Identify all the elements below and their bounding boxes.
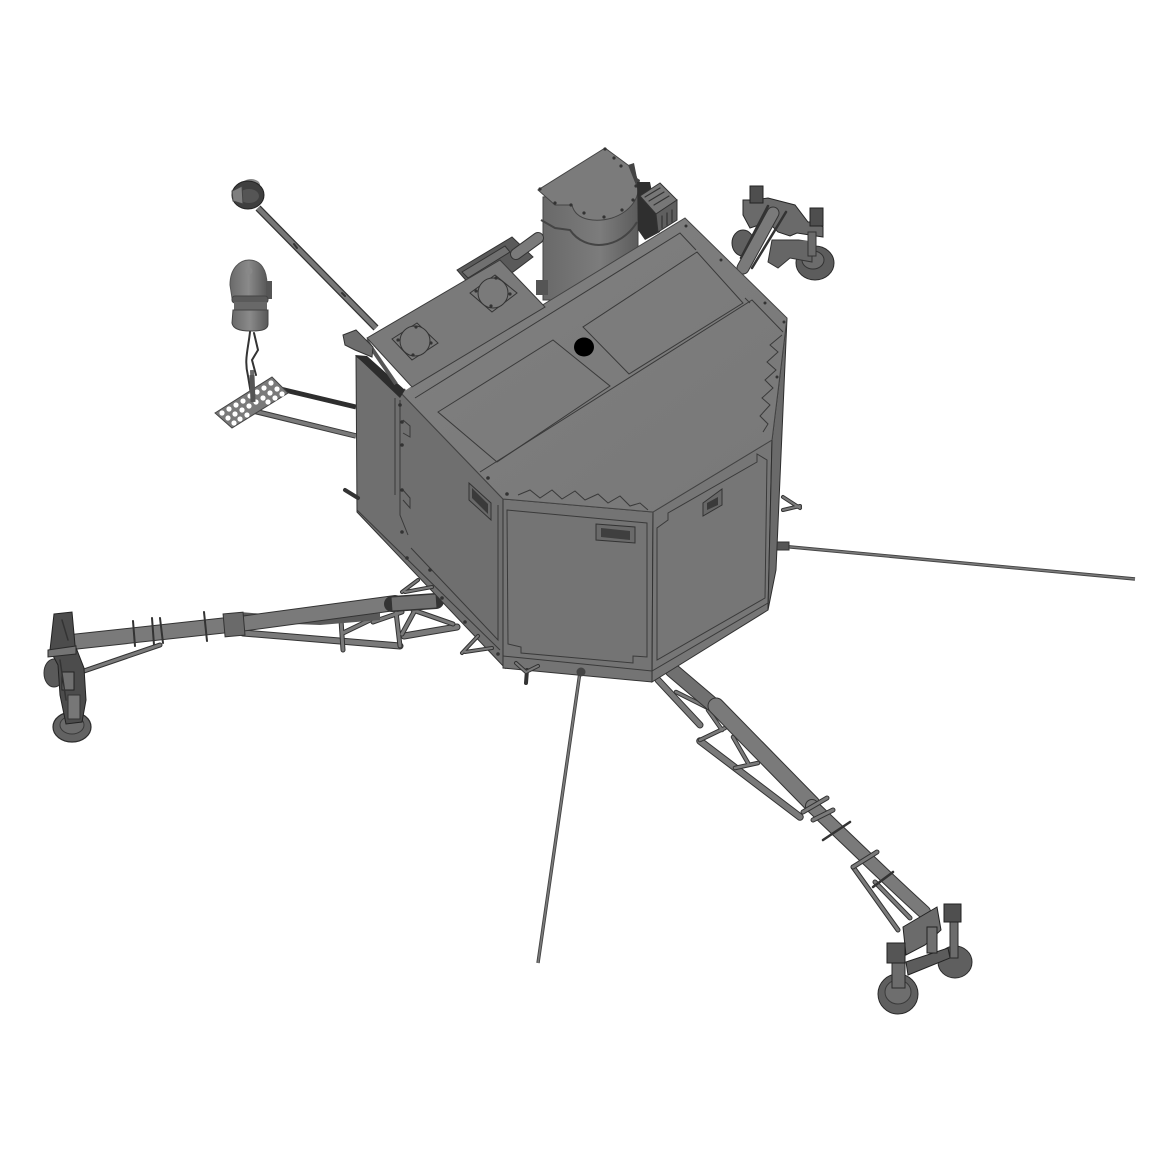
mounting hatch 1: [392, 323, 438, 360]
left face vent: [469, 483, 491, 520]
front face: [503, 499, 653, 682]
lander body: [356, 218, 787, 682]
hinge bracket: [343, 330, 373, 357]
right vent: [703, 489, 722, 516]
right foot: [878, 904, 972, 1014]
top face: [400, 218, 787, 512]
right face panel: [657, 454, 767, 660]
body rivets: [398, 224, 786, 656]
telescoping arm behind plate: [457, 237, 538, 285]
left foot: [44, 612, 91, 742]
leg: right: [658, 670, 972, 1014]
housing top plate: [538, 148, 638, 220]
leg: left: [44, 601, 457, 742]
left face panel lines: [400, 400, 498, 640]
hole: [574, 338, 594, 356]
leg: top right: [732, 186, 834, 280]
mounting hatch 2: [470, 275, 517, 312]
boom with sensor head: [232, 179, 376, 328]
zigzag edges: [518, 490, 648, 510]
body brackets and feet mounts: [345, 490, 800, 683]
right sliver face: [768, 318, 787, 610]
top mounting plate: [343, 260, 545, 398]
top face panel lines: [415, 233, 783, 472]
front face panel: [507, 510, 647, 663]
deployed sensor vessel on post: [230, 260, 272, 400]
front vent: [596, 524, 635, 543]
perforated plate with support struts: [215, 375, 356, 436]
right face: [652, 440, 772, 682]
electronics box: [637, 182, 677, 240]
antenna: bottom: [538, 672, 580, 963]
dark hinge beams: [355, 355, 405, 398]
cylindrical instrument housing: [536, 147, 677, 300]
sensor head: [232, 179, 264, 209]
antenna: right: [776, 542, 1135, 579]
left side face: [356, 356, 505, 668]
